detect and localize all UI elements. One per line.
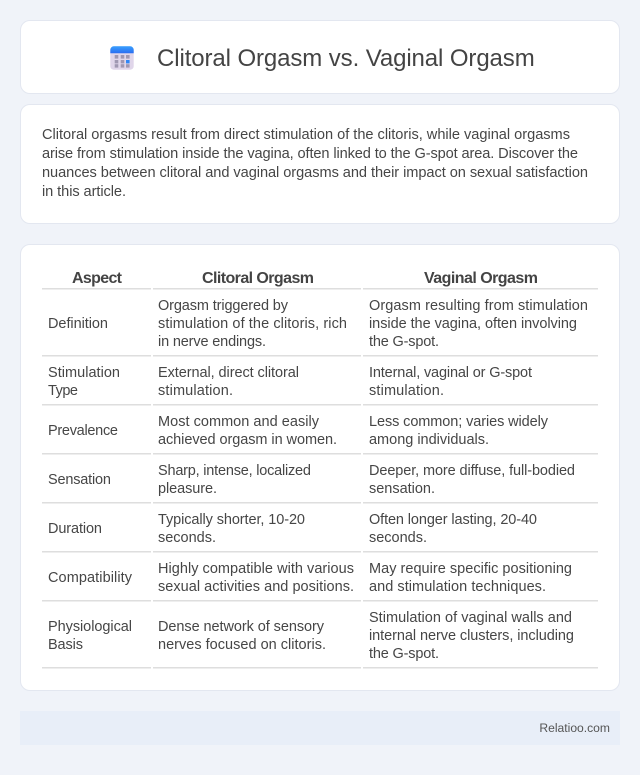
row: Definition: inside the vagina, often involving	[369, 316, 577, 332]
text block: introduction: Clitoral orgasms result from direct stimulation of the clitoris, while vaginal orgasms	[42, 127, 570, 143]
text block: introduction: in this article.	[42, 184, 126, 200]
text block: introduction	[42, 127, 588, 200]
row: Definition	[42, 298, 598, 356]
row: Duration: Often longer lasting, 20-40	[369, 512, 537, 528]
table header: Aspect	[72, 270, 123, 287]
row: Stimulation Type: Type	[48, 383, 78, 399]
row: Stimulation Type: External, direct clitoral	[158, 365, 299, 381]
comparison table	[42, 270, 598, 668]
row: Physiological Basis: Dense network of sensory	[158, 619, 325, 635]
panel: comparison table	[20, 244, 620, 691]
row: Compatibility: May require specific positioning	[369, 561, 572, 577]
row: Sensation: Deeper, more diffuse, full-bodied	[369, 463, 575, 479]
row: Physiological Basis: Stimulation of vaginal walls and	[369, 610, 572, 626]
row: Sensation: sensation.	[369, 481, 435, 497]
panel: title card	[20, 20, 620, 94]
row: Prevalence: Less common; varies widely	[369, 414, 549, 430]
row: Prevalence: among individuals.	[369, 432, 489, 448]
row: Prevalence: Prevalence	[48, 423, 118, 439]
row: Duration: seconds.	[158, 530, 216, 546]
row: Definition: Orgasm resulting from stimulation	[369, 298, 588, 314]
table header: Vaginal Orgasm	[424, 270, 538, 287]
row: Stimulation Type: stimulation.	[158, 383, 233, 399]
row: Definition: stimulation of the clitoris, rich	[158, 316, 347, 332]
table header	[42, 270, 598, 290]
row: Definition: Definition	[48, 316, 108, 332]
row: Physiological Basis: the G-spot.	[369, 646, 439, 662]
row: Compatibility: and stimulation techniques.	[369, 579, 546, 595]
icon: calendar	[110, 46, 134, 70]
text block: introduction: nuances between clitoral and vaginal orgasms and their impact on sexual satisfaction	[42, 165, 588, 181]
row: Physiological Basis: internal nerve clusters, including	[369, 628, 574, 644]
row: Physiological Basis: Physiological	[48, 619, 132, 635]
row: Duration: Duration	[48, 521, 102, 537]
row: Stimulation Type	[42, 365, 598, 406]
row: Compatibility	[42, 561, 598, 602]
row: Stimulation Type: stimulation.	[369, 383, 444, 399]
row: Prevalence: Most common and easily	[158, 414, 320, 430]
row: Stimulation Type: Stimulation	[48, 365, 120, 381]
row: Sensation: Sharp, intense, localized	[158, 463, 311, 479]
row: Sensation: Sensation	[48, 472, 111, 488]
panel: introduction	[20, 104, 620, 224]
row: Physiological Basis: nerves focused on clitoris.	[158, 637, 326, 653]
row: Physiological Basis	[42, 610, 598, 668]
title: Clitoral Orgasm vs. Vaginal Orgasm	[157, 45, 535, 72]
row: Sensation	[42, 463, 598, 504]
row: Definition: Orgasm triggered by	[158, 298, 289, 314]
row: Stimulation Type: Internal, vaginal or G-spot	[369, 365, 532, 381]
row: Definition: in nerve endings.	[158, 334, 266, 350]
row: Sensation: pleasure.	[158, 481, 217, 497]
table header: Clitoral Orgasm	[202, 270, 314, 287]
row: Compatibility: sexual activities and positions.	[158, 579, 354, 595]
row: Duration	[42, 512, 598, 552]
text block: introduction: arise from stimulation inside the vagina, often linked to the G-spot area. Discover the	[42, 146, 578, 162]
row: Physiological Basis: Basis	[48, 637, 83, 653]
footer text: Relatioo.com: Relatioo.com	[539, 721, 610, 735]
row: Duration: Typically shorter, 10-20	[158, 512, 305, 528]
row: Prevalence: achieved orgasm in women.	[158, 432, 337, 448]
row: Prevalence	[42, 414, 598, 454]
row: Definition: the G-spot.	[369, 334, 439, 350]
row: Compatibility: Highly compatible with various	[158, 561, 354, 577]
footer bar	[20, 711, 620, 745]
row: Compatibility: Compatibility	[48, 570, 133, 586]
row: Duration: seconds.	[369, 530, 427, 546]
